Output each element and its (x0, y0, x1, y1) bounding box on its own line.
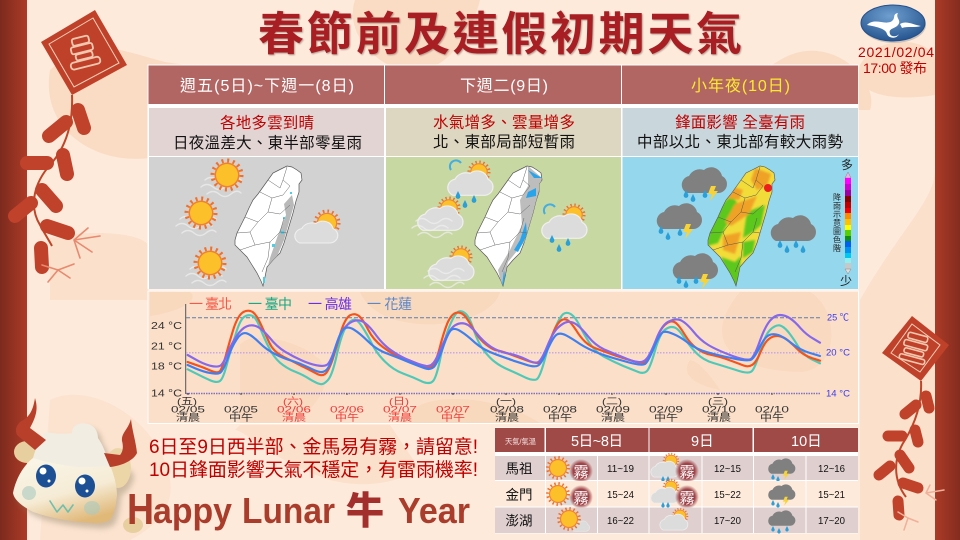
y axis: 21 °C (151, 342, 182, 352)
issue date: 2021/02/04 (858, 44, 934, 60)
x axis labels: 02/06 (277, 404, 311, 416)
legend: rainfall colour bar (833, 158, 853, 288)
row: Kinmen: 15~24 (607, 489, 634, 501)
legend: rainfall colour bar: 示 (833, 210, 841, 219)
table grid lines (546, 428, 806, 533)
map panel: 10th (622, 157, 858, 289)
map: Taiwan rainfall (707, 166, 775, 288)
greeting: Happy Lunar Year (127, 485, 470, 534)
x axis labels: (日) (389, 396, 409, 408)
map: Taiwan (235, 166, 302, 286)
table header: 5日~8日 (571, 434, 623, 450)
y axis: 24 °C (151, 321, 182, 332)
greeting: Happy Lunar Year: Lunar (242, 490, 335, 531)
left firecracker decoration (15, 10, 127, 282)
horn: left (16, 398, 46, 450)
header: column 1 (148, 66, 384, 104)
x axis labels: 中午 (654, 412, 678, 424)
greeting: Happy Lunar Year: H (127, 485, 154, 534)
x axis labels: 02/10 (702, 404, 736, 416)
map panel: 5th to 8th (149, 157, 384, 289)
notice text: 6日至9日西半部、金馬易有霧，請留意! (149, 436, 478, 458)
x axis labels: 02/09 (596, 404, 630, 416)
table header (495, 428, 858, 452)
legend: rainfall colour bar: 降 (833, 192, 841, 202)
reference labels: 20 °C (826, 348, 850, 358)
small bun (123, 517, 143, 533)
panel: temperature chart (148, 291, 858, 424)
legend: rainfall colour bar: 少 (840, 274, 852, 288)
x axis labels: (一) (496, 396, 516, 408)
x axis labels: 清晨 (388, 412, 413, 424)
legend: rainfall colour bar: 多 (841, 158, 853, 172)
icon: cloudy rain east (542, 204, 587, 252)
summary: column 2: 北、東部局部短暫雨 (433, 133, 575, 151)
row: Penghu (495, 508, 858, 534)
x axis labels: 02/10 (755, 404, 789, 416)
row: Kinmen: 霧 (574, 490, 589, 507)
line: Hualien (188, 328, 820, 374)
row: Matsu: 霧 (680, 464, 695, 481)
summary: column 1: 日夜溫差大、東半部零星雨 (173, 134, 362, 152)
summary: column 2 (386, 108, 621, 156)
x axis labels: 中午 (229, 412, 253, 424)
x axis labels: 02/08 (543, 404, 577, 416)
greeting: Happy Lunar Year: Year (398, 490, 470, 531)
row: Penghu: 澎湖 (506, 514, 532, 528)
left side strip (0, 0, 27, 540)
icon: thunderstorm west (657, 203, 702, 240)
header: column 3: 小年夜(10日) (691, 77, 790, 95)
x axis labels: 中午 (760, 412, 784, 424)
x axis labels: 中午 (548, 412, 572, 424)
x axis labels: 中午 (335, 412, 359, 424)
panel: forecast table frame (148, 64, 858, 290)
row: Kinmen: 霧 (680, 490, 695, 507)
header: column 1: 週五(5日)~下週一(8日) (180, 77, 354, 95)
summary: column 3: 鋒面影響 全臺有雨 (675, 114, 805, 132)
legend: city lines: 一 臺北 (189, 296, 232, 312)
icon: sunny with fog north (201, 160, 242, 196)
reference labels: 14 °C (826, 388, 850, 400)
legend: city lines: 一 花蓮 (367, 296, 412, 312)
icon: rain east (771, 215, 816, 253)
icon: sunny with fog south (186, 248, 226, 286)
line: Kaohsiung (188, 315, 820, 367)
legend: rainfall colour bar: 色 (833, 234, 841, 244)
mascot: ox (13, 398, 143, 533)
x axis labels: (六) (283, 396, 303, 408)
x axis labels: 清晨 (601, 412, 626, 424)
reference lines (186, 318, 820, 395)
title: 春節前及連假初期天氣 (258, 8, 742, 60)
row: Kinmen (495, 480, 858, 509)
icon: cloudy fog west (412, 198, 463, 238)
notice text: 10日鋒面影響天氣不穩定，有雷雨機率! (149, 459, 478, 481)
x axis labels: (二) (602, 396, 622, 408)
eyes (36, 464, 95, 498)
row: Matsu (495, 454, 858, 483)
row: Penghu: 17~20 (714, 515, 741, 527)
logo: weather bureau (861, 5, 926, 43)
y axis: 18 °C (151, 362, 182, 372)
summary: column 3 (622, 108, 858, 156)
icon: cloudy fog south (424, 247, 474, 288)
line: Taipei (188, 311, 820, 375)
legend: rainfall colour bar: 意 (833, 218, 841, 228)
y axis (151, 304, 186, 400)
legend: city lines (189, 296, 412, 312)
legend: city lines: 一 臺中 (248, 296, 292, 312)
mouth and cheeks (22, 486, 100, 515)
summary: column 1 (149, 108, 384, 156)
map panel: 9th (386, 157, 621, 289)
map: Taiwan (475, 166, 542, 286)
row: Penghu: 17~20 (818, 515, 845, 527)
x axis labels: 02/05 (171, 404, 205, 416)
table header: 10日 (791, 434, 822, 450)
x axis labels: 02/07 (383, 404, 417, 416)
row: Matsu: 12~16 (818, 463, 845, 475)
table header: 9日 (691, 434, 714, 450)
x axis labels: 02/09 (649, 404, 683, 416)
icon: sunny with fog west (176, 198, 216, 236)
right side strip (935, 0, 960, 540)
greeting: Happy Lunar Year: 牛 (346, 491, 384, 533)
x axis labels: 清晨 (282, 412, 307, 424)
header: column 3 (622, 66, 858, 104)
row: Kinmen: 15~22 (714, 489, 741, 501)
x axis labels: 02/05 (224, 404, 258, 416)
x axis labels: 02/07 (436, 404, 470, 416)
x axis labels: 02/06 (330, 404, 364, 416)
panel: outlying islands table (495, 428, 858, 534)
x axis labels: 清晨 (707, 412, 732, 424)
icon: thunderstorm north (682, 167, 727, 202)
summary: column 2: 水氣增多、雲量增多 (433, 114, 575, 132)
row: Matsu: 霧 (574, 464, 589, 481)
x axis labels: 清晨 (176, 412, 201, 424)
icon: cloudy rain north (448, 160, 493, 208)
legend: rainfall colour bar: 階 (833, 244, 841, 253)
horn: right (104, 419, 137, 467)
row: Penghu: 16~22 (607, 515, 634, 527)
icon: thunderstorm south (673, 253, 718, 289)
title: 春節前及連假初期天氣 (259, 9, 743, 61)
reference labels: 25 ℃ (827, 312, 849, 324)
issue date: 17:00 發布 (863, 60, 927, 76)
row: Matsu: 12~15 (714, 463, 741, 475)
notice text (149, 436, 478, 481)
x axis labels (171, 396, 789, 424)
right firecracker decoration (879, 316, 949, 530)
icon: partly cloudy east (295, 211, 339, 243)
greeting: Happy Lunar Year: appy (153, 490, 232, 531)
x axis labels: 02/08 (490, 404, 524, 416)
summary: column 1: 各地多雲到晴 (220, 114, 314, 132)
x axis labels: (五) (177, 396, 197, 408)
x axis labels: 中午 (441, 412, 465, 424)
row: Kinmen: 金門 (506, 488, 532, 502)
row: Matsu: 11~19 (607, 463, 634, 475)
row: Matsu: 馬祖 (506, 462, 532, 476)
table header: 天氣/氣溫 (505, 436, 536, 446)
header: column 2: 下週二(9日) (460, 77, 548, 95)
summary: column 3: 中部以北、東北部有較大雨勢 (637, 133, 843, 151)
temperature lines (188, 311, 820, 384)
y axis: 14 °C (151, 388, 182, 400)
reference labels (826, 312, 850, 400)
legend: city lines: 一 高雄 (308, 296, 352, 312)
header: column 2 (385, 66, 621, 104)
line: Taichung (188, 311, 820, 384)
legend: rainfall colour bar: 雨 (833, 202, 841, 210)
issue date (858, 44, 934, 76)
legend: rainfall colour bar: 圖 (833, 227, 841, 236)
x axis labels: 清晨 (495, 412, 520, 424)
row: Kinmen: 15~21 (818, 489, 845, 501)
x axis labels: (三) (708, 396, 728, 408)
